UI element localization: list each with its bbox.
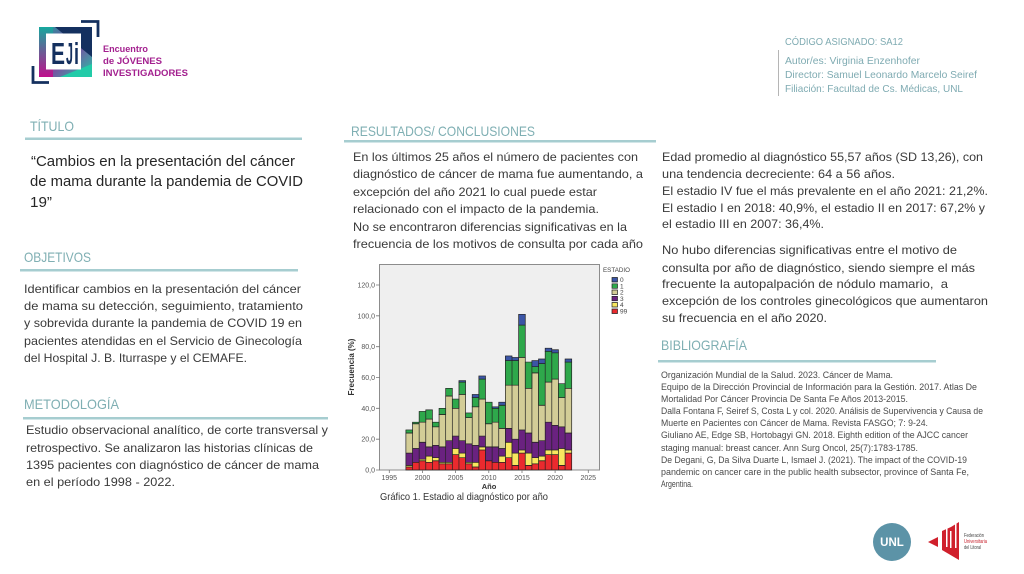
- references list: staging manual: breast cancer. Ann Surg Oncol, 25(7):1783-1785.: [661, 443, 918, 453]
- federation name: del Litoral: [964, 545, 981, 551]
- authors block: Autor/es: Virginia Enzenhofer: [785, 55, 920, 67]
- panel: edad y estadios: El estadio IV fue el más prevalente en el año 2021: 21,2%.: [662, 184, 988, 198]
- panel: motivo de consulta: consulta por año de diagnóstico, siendo siempre el más: [662, 261, 975, 275]
- panel: título: [25, 118, 303, 211]
- heading: título: TÍTULO: [30, 118, 74, 134]
- legend: ESTADIO: [603, 267, 630, 274]
- panel: objetivos: [20, 249, 303, 365]
- resultados text: En los últimos 25 años el número de pacientes con: [353, 150, 638, 164]
- authors block: [785, 55, 977, 95]
- x axis ticks and labels: 2005: [448, 475, 463, 482]
- y axis ticks and labels: 60,0: [361, 375, 375, 382]
- references list: Dalla Fontana F, Seiref S, Costa L y col. 2020. Análisis de Supervivencia y Causa de: [661, 406, 983, 416]
- poster title: 19”: [30, 194, 52, 211]
- authors block: Director: Samuel Leonardo Marcelo Seiref: [785, 69, 977, 81]
- objetivos text: y sobrevida durante la pandemia de COVID 19 en: [24, 316, 302, 330]
- panel: motivo de consulta: frecuente la autopalpación de nódulo mamario, a: [662, 277, 948, 291]
- resultados text: excepción del año 2021 lo cual puede estar: [353, 185, 597, 199]
- metodología text: retrospectivo. Se analizaron las historias clínicas de: [26, 441, 313, 455]
- resultados text: [353, 150, 643, 251]
- legend: 1: [620, 283, 624, 290]
- heading: metodología: METODOLOGÍA: [24, 396, 120, 412]
- heading: resultados: RESULTADOS/ CONCLUSIONES: [351, 123, 535, 139]
- y axis ticks and labels: [357, 282, 380, 474]
- plot area: [380, 264, 600, 470]
- objetivos text: pacientes atendidas en el Servicio de Ginecología: [24, 334, 302, 348]
- panel: motivo de consulta: su frecuencia en el año 2020.: [662, 311, 827, 325]
- references list: Giuliano AE, Edge SB, Hortobagyi GN. 2018. Eighth edition of the AJCC cancer: [661, 430, 968, 440]
- x axis ticks and labels: 1995: [382, 475, 397, 482]
- poster title: “Cambios en la presentación del cáncer: [31, 153, 295, 170]
- references list: Organización Mundial de la Salud. 2023. Cáncer de Mama.: [661, 370, 893, 380]
- references list: Mortalidad Por Cáncer Provincia De Santa Fe Años 2013-2015.: [661, 394, 908, 404]
- references list: Argentina.: [661, 479, 693, 489]
- panel: edad y estadios: el estadio III en 2007: 36,4%.: [662, 217, 824, 231]
- panel: metodología: [23, 396, 328, 489]
- references list: De Degani, G, Da Silva Duarte L, Ismael J. (2021). The impact of the COVID-19: [661, 455, 967, 465]
- logo wordmark: de JÓVENES: [103, 55, 162, 67]
- panel: edad y estadios: Edad promedio al diagnóstico 55,57 años (SD 13,26), con: [662, 150, 983, 164]
- heading: objetivos: OBJETIVOS: [24, 249, 91, 265]
- federation name: Federación: [964, 533, 984, 539]
- references list: Muerte en Pacientes con Cáncer de Mama. Revista FASGO; 7: 9-24.: [661, 418, 928, 428]
- logo: Federación Universitaria del Litoral: [928, 522, 987, 560]
- poster title: [30, 153, 303, 211]
- header: code and authors: [778, 35, 977, 96]
- y axis ticks and labels: 80,0: [361, 344, 375, 351]
- logo: UNL: UNL: [880, 537, 904, 549]
- logo: UNL: [873, 523, 911, 561]
- references list: pandemic on cancer care in the public health subsector, province of Santa Fe,: [661, 467, 969, 477]
- panel: motivo de consulta: excepción de los controles ginecológicos que aumentaron: [662, 294, 988, 308]
- federation name: Universitaria: [964, 539, 987, 545]
- poster title: de mama durante la pandemia de COVID: [30, 173, 303, 190]
- x axis ticks and labels: 2020: [547, 475, 563, 482]
- resultados text: No se encontraron diferencias significativas en la: [353, 220, 627, 234]
- panel: resultados: [344, 123, 656, 251]
- metodología text: [26, 423, 328, 489]
- metodología text: 1395 pacientes con diagnóstico de cáncer de mama: [26, 458, 319, 472]
- icon: red triangles: [928, 522, 959, 560]
- panel: edad y estadios: [662, 150, 988, 231]
- resultados text: relacionado con el impacto de la pandemia.: [353, 202, 599, 216]
- x axis ticks and labels: 2015: [514, 475, 530, 482]
- logo wordmark: INVESTIGADORES: [103, 68, 188, 79]
- panel: bibliografía: [658, 337, 983, 489]
- legend: 3: [620, 296, 624, 303]
- chart caption: Gráfico 1. Estadio al diagnóstico por año: [380, 491, 548, 503]
- icon: gradient square: J: [66, 36, 73, 71]
- x axis ticks and labels: [382, 470, 596, 482]
- logo: Encuentro de Jóvenes Investigadores: [33, 22, 188, 82]
- legend: [603, 267, 630, 316]
- y axis ticks and labels: 0,0: [365, 468, 375, 474]
- resultados text: diagnóstico de cáncer de mama fue aumentando, a: [353, 167, 643, 181]
- icon: gradient square: i: [74, 36, 79, 71]
- x axis ticks and labels: 2000: [415, 475, 430, 482]
- resultados text: frecuencia de los motivos de consulta por cada año: [353, 237, 643, 251]
- references list: Equipo de la Dirección Provincial de Información para la Gestión. 2017. Atlas De: [661, 382, 977, 392]
- y axis ticks and labels: 40,0: [361, 406, 375, 413]
- federation name: [964, 533, 987, 551]
- objetivos text: [24, 282, 303, 365]
- logo wordmark: [103, 44, 188, 79]
- y axis title: Frecuencia (%): [347, 338, 356, 395]
- metodología text: Estudio observacional analítico, de corte transversal y: [26, 423, 328, 437]
- x axis ticks and labels: 2025: [581, 475, 596, 482]
- panel: edad y estadios: una tendencia decreciente: 64 a 56 años.: [662, 167, 895, 181]
- icon: gradient square: [33, 22, 98, 82]
- x axis ticks and labels: 2010: [481, 475, 497, 482]
- y axis ticks and labels: 120,0: [357, 282, 375, 290]
- assigned code: CÓDIGO ASIGNADO: SA12: [785, 35, 903, 48]
- authors block: Filiación: Facultad de Cs. Médicas, UNL: [785, 83, 963, 95]
- x axis title: Año: [482, 482, 497, 491]
- objetivos text: del Hospital J. B. Iturraspe y el CEMAFE.: [24, 351, 247, 365]
- legend: 99: [620, 308, 628, 316]
- divider line: [778, 50, 779, 96]
- y axis ticks and labels: 100,0: [357, 313, 375, 320]
- panel: motivo de consulta: [662, 243, 988, 325]
- legend: 4: [620, 302, 624, 309]
- references list: [661, 370, 983, 489]
- stacked bars: [406, 314, 572, 470]
- panel: edad y estadios: El estadio I en 2018: 40,9%, el estadio II en 2017: 67,2% y: [662, 201, 985, 215]
- icon: gradient square: E: [51, 36, 65, 71]
- heading: bibliografía: BIBLIOGRAFÍA: [661, 337, 748, 353]
- legend: 2: [620, 290, 624, 296]
- stacked bar chart: estadio por año: [347, 264, 630, 503]
- objetivos text: de mama su detección, seguimiento, tratamiento: [24, 299, 303, 313]
- objetivos text: Identificar cambios en la presentación del cáncer: [24, 282, 301, 296]
- metodología text: en el período 1998 - 2022.: [26, 475, 175, 489]
- panel: motivo de consulta: No hubo diferencias significativas entre el motivo de: [662, 243, 957, 257]
- logo wordmark: Encuentro: [103, 44, 148, 55]
- legend: 0: [620, 277, 624, 284]
- y axis ticks and labels: 20,0: [361, 437, 375, 444]
